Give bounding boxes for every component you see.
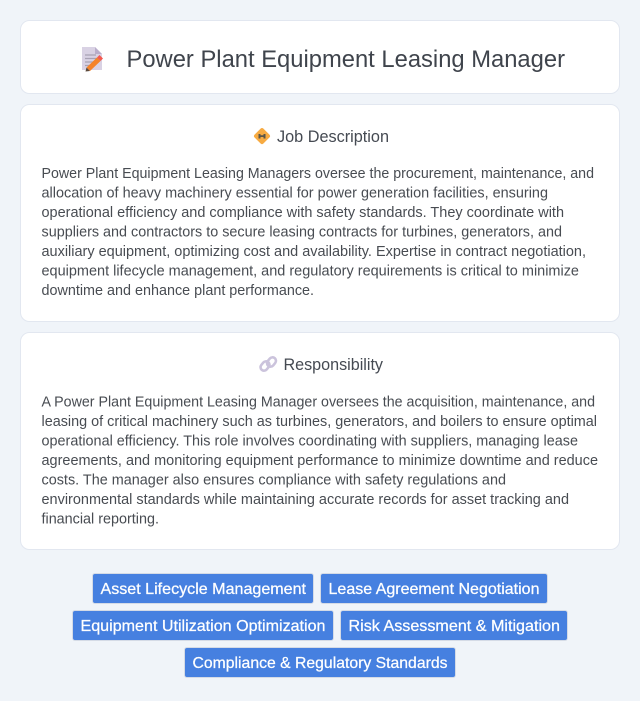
panel: responsibility <box>20 332 620 550</box>
panel: title card <box>20 20 620 94</box>
heading: job description: Job Description <box>277 128 389 146</box>
text block: responsibility: agreements, and monitoring equipment performance to minimize downtime and reduce <box>42 453 598 469</box>
tag: lease agreement negotiation: Lease Agreement Negotiation <box>328 581 540 598</box>
tag: equipment utilization optimization <box>72 610 334 640</box>
tag group: skills <box>72 574 568 678</box>
icon: document with pencil <box>82 47 103 72</box>
icon: chain link <box>259 356 277 372</box>
tag: equipment utilization optimization: Equipment Utilization Optimization <box>80 618 326 635</box>
text block: responsibility: environmental standards while maintaining accurate records for asset tracking and <box>42 492 569 508</box>
text block: job description: suppliers and contractors to secure leasing contracts for turbines, generators, and <box>42 224 562 240</box>
text block: responsibility: costs. The manager also ensures compliance with safety regulations and <box>42 472 506 488</box>
tag: compliance and regulatory standards: Compliance & Regulatory Standards <box>192 655 448 672</box>
text block: responsibility: operational efficiency. This role involves coordinating with suppliers, managing lease <box>42 434 578 450</box>
text block: job description: auxiliary equipment, optimizing cost and availability. Expertise in contract negotiation, <box>42 244 586 260</box>
panel: job description <box>20 104 620 322</box>
text block: job description: allocation of heavy machinery essential for power generation facilities, ensuring <box>42 186 548 202</box>
tag: compliance and regulatory standards <box>184 648 456 678</box>
text block: responsibility: leasing of critical machinery such as turbines, generators, and boilers to ensure optimal <box>42 414 597 430</box>
heading: responsibility: Responsibility <box>284 356 384 374</box>
text block: job description: downtime and enhance plant performance. <box>42 283 314 299</box>
text block: responsibility <box>42 394 598 528</box>
text block: job description: operational efficiency and compliance with safety standards. They coordinate with <box>42 205 564 221</box>
tag: lease agreement negotiation <box>320 574 548 604</box>
text block: job description: Power Plant Equipment Leasing Managers oversee the procurement, maintenance, and <box>42 166 594 182</box>
icon: orange diamond <box>253 127 271 145</box>
text block: job description: equipment lifecycle management, and regulatory requirements is critical to minimize <box>42 264 579 280</box>
text block: responsibility: financial reporting. <box>42 512 159 528</box>
tag: risk assessment and mitigation: Risk Assessment & Mitigation <box>348 618 560 635</box>
text block: job description <box>42 166 594 299</box>
text block: responsibility: A Power Plant Equipment Leasing Manager oversees the acquisition, maintenance, and <box>42 394 595 410</box>
title: Power Plant Equipment Leasing Manager <box>126 46 565 73</box>
tag: asset lifecycle management: Asset Lifecycle Management <box>100 581 307 598</box>
tag: asset lifecycle management <box>92 574 314 604</box>
tag: risk assessment and mitigation <box>340 610 568 640</box>
